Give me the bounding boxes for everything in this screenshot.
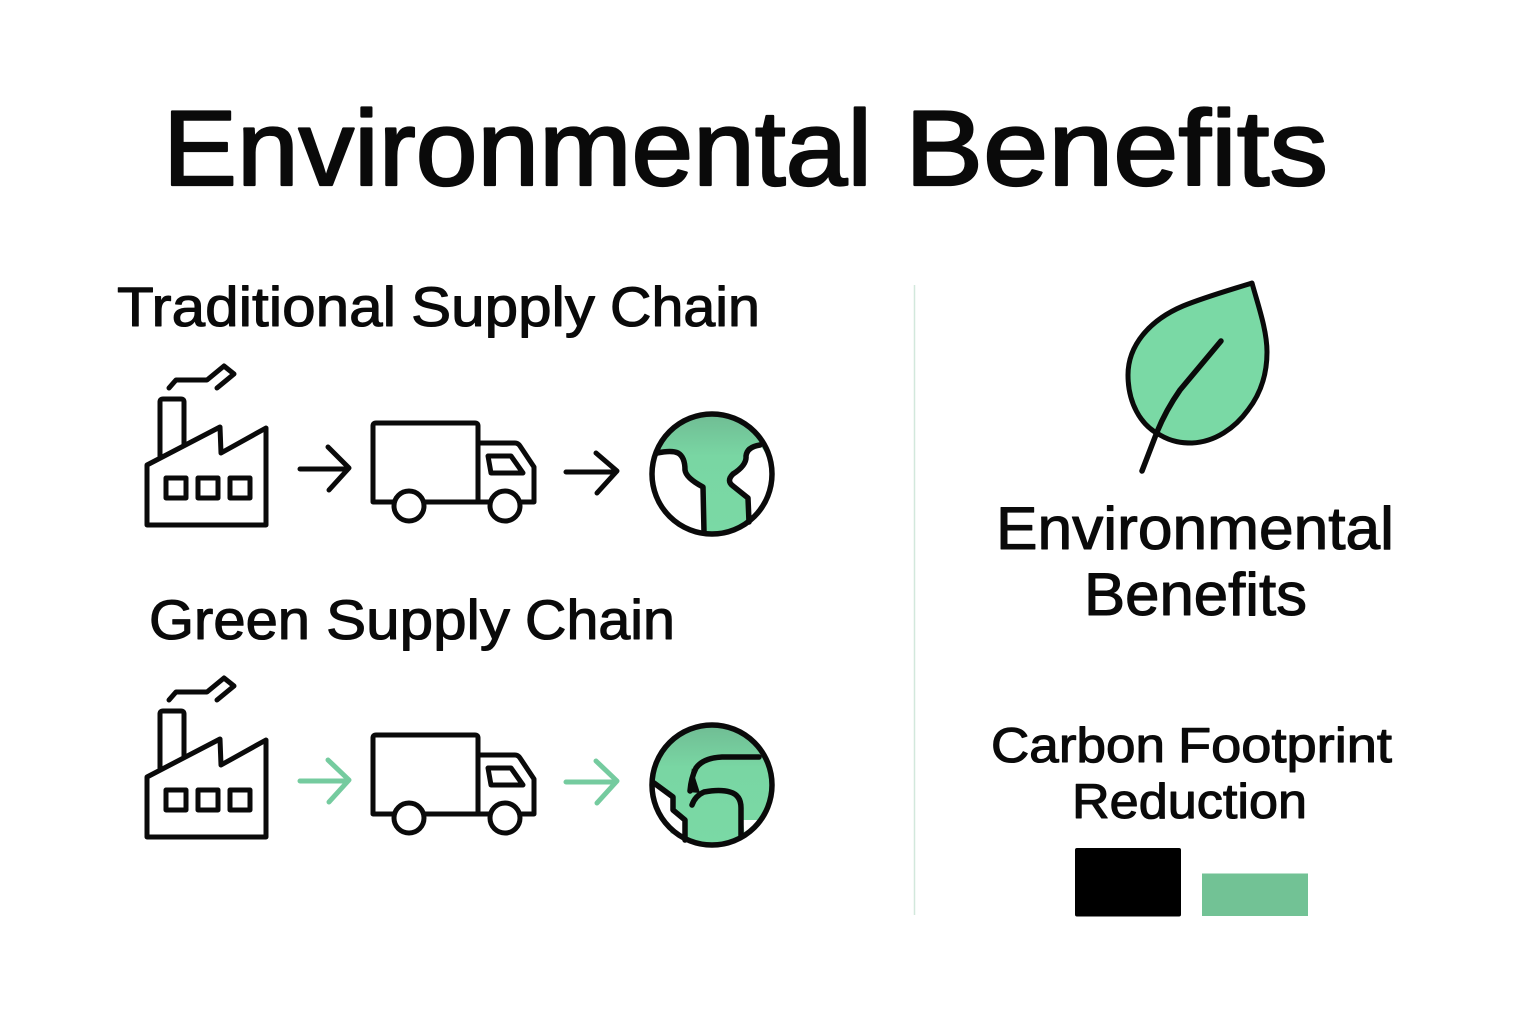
title: Benefits	[905, 88, 1328, 208]
icon: globe with mostly green	[652, 725, 772, 845]
arrow: factory to truck	[300, 760, 349, 802]
icon: globe with limited green	[652, 414, 772, 534]
heading: green supply chain: Chain	[525, 588, 675, 651]
icon: factory	[147, 678, 266, 837]
heading: environmental benefits: Benefits	[1084, 561, 1307, 628]
heading: environmental benefits: Environmental	[996, 495, 1394, 562]
heading: green supply chain	[149, 588, 675, 651]
heading: carbon footprint reduction: Carbon	[991, 719, 1165, 773]
icon: truck	[373, 423, 534, 521]
icon: factory	[147, 366, 266, 525]
heading: traditional supply chain: Supply	[411, 275, 595, 338]
heading: traditional supply chain	[117, 275, 760, 338]
arrow: truck to globe	[566, 453, 617, 493]
title	[163, 88, 1328, 208]
title: Environmental	[163, 88, 872, 208]
bar chart: carbon footprint comparison	[1075, 848, 1308, 916]
heading: traditional supply chain: Traditional	[117, 275, 396, 338]
icon: truck	[373, 735, 534, 833]
heading: green supply chain: Green	[149, 588, 310, 651]
heading: carbon footprint reduction: Reduction	[1072, 775, 1307, 829]
heading: green supply chain: Supply	[326, 588, 510, 651]
icon: leaf	[1128, 283, 1267, 471]
heading: carbon footprint reduction: Footprint	[1178, 719, 1392, 773]
row: traditional supply chain flow	[147, 366, 772, 534]
heading: carbon footprint reduction	[991, 719, 1392, 829]
heading: traditional supply chain: Chain	[610, 275, 760, 338]
heading: environmental benefits	[996, 495, 1394, 628]
row: green supply chain flow	[147, 678, 772, 845]
panel: supply chain comparison	[117, 275, 772, 845]
panel: environmental benefits summary	[991, 283, 1394, 916]
arrow: truck to globe	[566, 761, 617, 803]
arrow: factory to truck	[300, 447, 349, 490]
